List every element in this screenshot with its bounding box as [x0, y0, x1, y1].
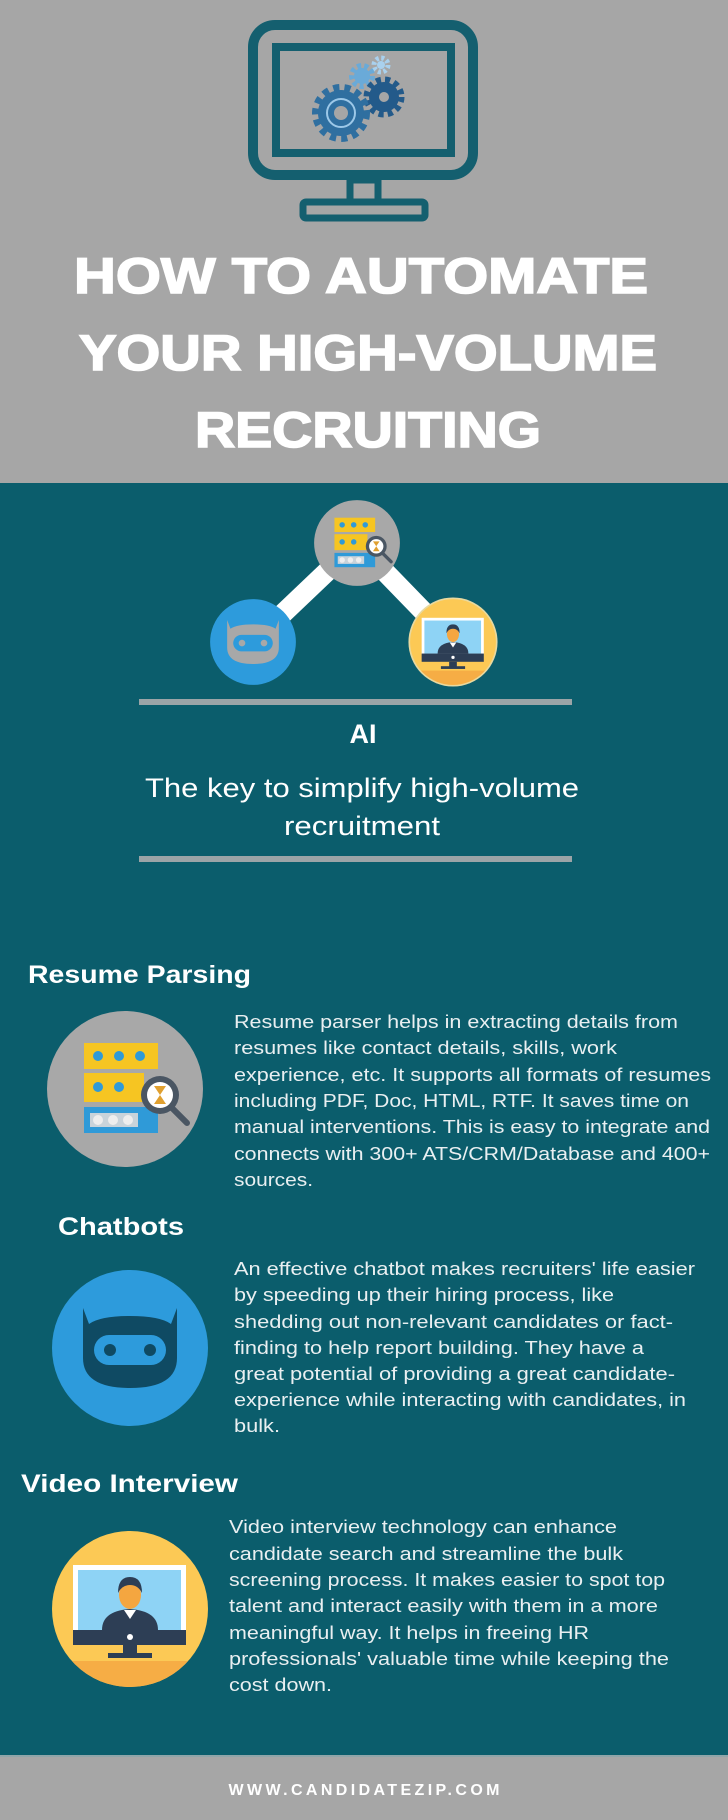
text: chatbots: great potential of providing a great candidate- [234, 1364, 675, 1384]
AI network diagram [210, 500, 498, 693]
subtitle [145, 773, 579, 841]
icon: chatbot (small) [210, 599, 296, 685]
icon: monitor with gears [253, 25, 473, 218]
text: resume parsing: manual interventions. This is easy to integrate and [234, 1117, 710, 1137]
text: chatbots: An effective chatbot makes recruiters' life easier [234, 1259, 695, 1279]
text: resume parsing: Resume parser helps in extracting details from [234, 1012, 678, 1032]
main teal panel [0, 483, 728, 1755]
icon: video interview [50, 1531, 210, 1701]
subtitle: The key to simplify high-volume [145, 773, 579, 803]
section: resume parsing [28, 961, 711, 1190]
icon: resume [47, 1011, 203, 1167]
text: resume parsing: including PDF, Doc, HTML, RTF. It saves time on [234, 1091, 689, 1111]
footer: WWW.CANDIDATEZIP.COM [228, 1782, 500, 1799]
section: video interview [21, 1470, 669, 1701]
section: chatbots [52, 1213, 695, 1436]
text: video interview: screening process. It makes easier to spot top [229, 1570, 665, 1590]
text: resume parsing: sources. [234, 1170, 313, 1190]
header panel [0, 0, 728, 483]
text: chatbots: bulk. [234, 1416, 280, 1436]
text: resume parsing: resumes like contact details, skills, work [234, 1038, 618, 1058]
text: video interview [229, 1517, 669, 1695]
text: chatbots: experience while interacting with candidates, in [234, 1390, 686, 1410]
heading: video interview: Video Interview [21, 1470, 239, 1498]
title [74, 248, 657, 458]
text: video interview: talent and interact easily with them in a more [229, 1596, 658, 1616]
heading: chatbots: Chatbots [58, 1213, 184, 1241]
text: resume parsing: connects with 300+ ATS/CRM/Database and 400+ [234, 1144, 710, 1164]
text: video interview: Video interview technology can enhance [229, 1517, 617, 1537]
icon: chatbot [52, 1270, 208, 1426]
title: HOW TO AUTOMATE [74, 248, 648, 304]
text: video interview: candidate search and streamline the bulk [229, 1544, 624, 1564]
text: resume parsing [234, 1012, 711, 1190]
text: resume parsing: experience, etc. It supports all formats of resumes [234, 1065, 711, 1085]
text: video interview: meaningful way. It helps in freeing HR [229, 1623, 589, 1643]
text: chatbots: shedding out non-relevant candidates or fact- [234, 1312, 673, 1332]
icon: resume (small) [314, 500, 400, 586]
icon: video (small) [408, 597, 498, 693]
text: video interview: professionals' valuable time while keeping the [229, 1649, 669, 1669]
title: RECRUITING [195, 402, 541, 458]
title: YOUR HIGH-VOLUME [79, 325, 657, 381]
AI heading: AI [350, 719, 376, 749]
footer [0, 1755, 728, 1820]
subtitle: recruitment [284, 811, 441, 841]
text: chatbots: by speeding up their hiring process, like [234, 1285, 614, 1305]
text: chatbots [234, 1259, 695, 1436]
text: chatbots: finding to help report building. They have a [234, 1338, 645, 1358]
text: video interview: cost down. [229, 1675, 332, 1695]
heading: resume parsing: Resume Parsing [28, 961, 251, 989]
